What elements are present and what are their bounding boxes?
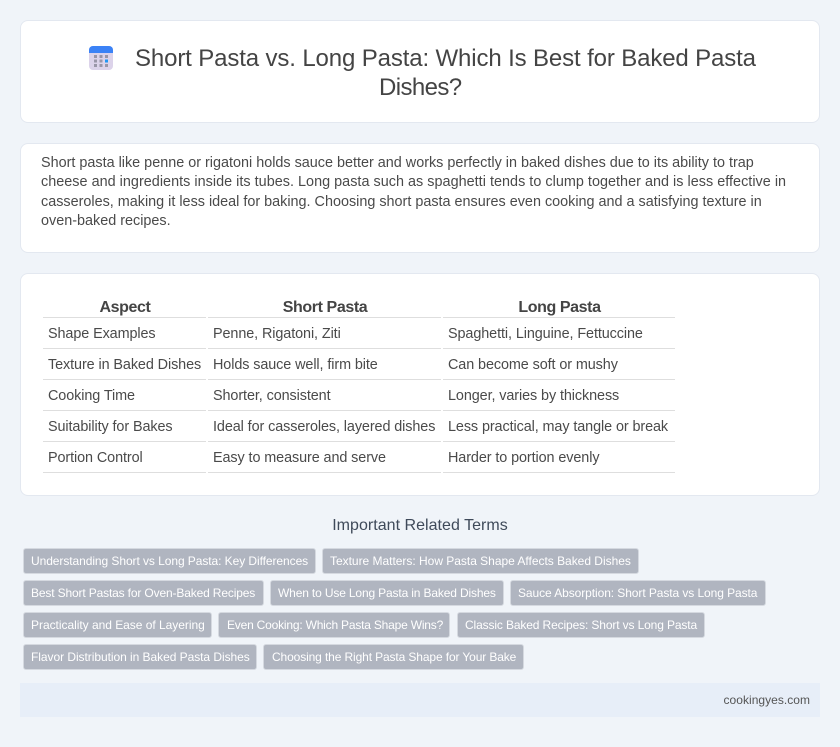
intro paragraph: cheese and ingredients inside its tubes. Long pasta such as spaghetti tends to clump together and is less effective in: [41, 174, 786, 190]
intro paragraph: [41, 155, 786, 229]
table rows: Shape Examples: [48, 326, 156, 342]
header panel: [20, 20, 820, 123]
table rows: Spaghetti, Linguine, Fettuccine: [448, 326, 643, 342]
title: Short Pasta vs. Long Pasta: Which Is Best for Baked Pasta: [135, 45, 756, 72]
table rows: [43, 317, 675, 473]
table rows: Easy to measure and serve: [213, 450, 386, 466]
table rows: Suitability for Bakes: [48, 419, 172, 435]
table rows: Penne, Rigatoni, Ziti: [213, 326, 341, 342]
comparison table panel: [20, 273, 820, 496]
table rows: Ideal for casseroles, layered dishes: [213, 419, 435, 435]
intro paragraph: oven-baked recipes.: [41, 213, 171, 229]
source credit: cookingyes.com: [724, 693, 810, 707]
table headers: Short Pasta: [283, 299, 367, 316]
table rows: Holds sauce well, firm bite: [213, 357, 378, 373]
table headers: Aspect: [100, 299, 150, 316]
table rows: Shorter, consistent: [213, 388, 330, 404]
table rows: Cooking Time: [48, 388, 135, 404]
table rows: Harder to portion evenly: [448, 450, 599, 466]
title: [135, 45, 756, 101]
intro paragraph: casseroles, making it less ideal for baking. Choosing short pasta ensures even cooking and a satisfying texture in: [41, 194, 762, 210]
table rows: Less practical, may tangle or break: [448, 419, 668, 435]
table rows: Portion Control: [48, 450, 143, 466]
related terms tags: Best Short Pastas for Oven-Baked Recipes: [31, 586, 255, 600]
related terms tags: Even Cooking: Which Pasta Shape Wins?: [227, 618, 443, 632]
related terms tags: Practicality and Ease of Layering: [31, 618, 205, 632]
related terms tags: Classic Baked Recipes: Short vs Long Pasta: [465, 618, 697, 632]
icon: calendar: [89, 46, 113, 70]
intro paragraph: Short pasta like penne or rigatoni holds sauce better and works perfectly in baked dishes due to its ability to trap: [41, 155, 754, 171]
related terms tags: Understanding Short vs Long Pasta: Key Differences: [31, 554, 308, 568]
table headers: Long Pasta: [518, 299, 601, 316]
related terms tags: [23, 548, 766, 670]
title: Dishes?: [379, 74, 462, 101]
related terms tags: Choosing the Right Pasta Shape for Your Bake: [272, 650, 516, 664]
table rows: Can become soft or mushy: [448, 357, 618, 373]
table rows: Texture in Baked Dishes: [48, 357, 201, 373]
intro text panel: [20, 143, 820, 253]
table rows: Longer, varies by thickness: [448, 388, 619, 404]
table headers: [100, 299, 602, 316]
footer: [20, 683, 820, 717]
related terms tags: Sauce Absorption: Short Pasta vs Long Pasta: [518, 586, 757, 600]
related terms heading: Important Related Terms: [332, 517, 508, 534]
related terms tags: When to Use Long Pasta in Baked Dishes: [278, 586, 496, 600]
related terms tags: Texture Matters: How Pasta Shape Affects Baked Dishes: [330, 554, 631, 568]
related terms tags: Flavor Distribution in Baked Pasta Dishes: [31, 650, 250, 664]
